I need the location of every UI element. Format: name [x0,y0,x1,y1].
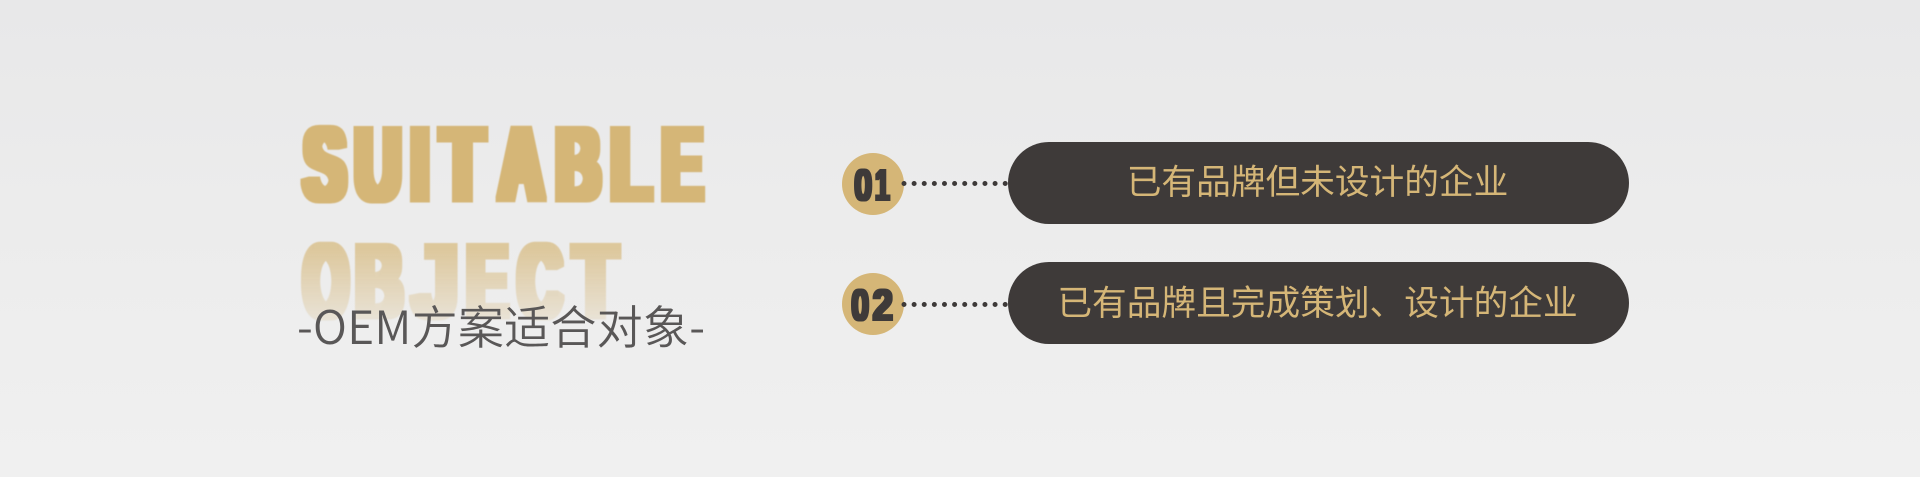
row 1: number badge: 0 [854,161,872,210]
row 2: dotted connector [904,302,1008,307]
heading: SUITABLE: A [500,107,543,223]
heading: SUITABLE: B [556,107,600,223]
row 2: number badge: 0 [851,281,869,330]
heading: SUITABLE: I [411,107,429,223]
heading: OBJECT (fading): C [519,223,561,339]
row 2: pill: 已有品牌且完成策划、设计的企业 [1057,284,1578,323]
heading: SUITABLE: U [355,107,400,223]
row 1: pill [1008,142,1629,224]
heading: SUITABLE: L [611,108,651,223]
row 1: pill: 已有品牌但未设计的企业 [1127,163,1508,202]
row 1: dotted connector [904,181,1008,186]
heading: OBJECT (fading): E [468,222,507,339]
heading: SUITABLE: E [662,105,702,222]
heading: OBJECT (fading): T [574,223,617,339]
heading: OBJECT (fading): O [304,223,347,339]
heading: SUITABLE [304,105,702,223]
heading: OBJECT (fading) [304,222,617,340]
row 2: number badge: 2 [872,280,893,330]
row 1: number badge: 1 [875,160,890,210]
heading: OBJECT (fading): B [356,224,402,340]
row 2: number badge [842,273,904,335]
row 1: number badge [842,153,904,215]
heading: OBJECT (fading): J [413,223,458,339]
heading: SUITABLE: S [304,108,345,223]
subtitle: -OEM方案适合对象- [297,292,705,358]
heading: SUITABLE: T [441,106,484,222]
row 2: pill [1008,262,1629,344]
